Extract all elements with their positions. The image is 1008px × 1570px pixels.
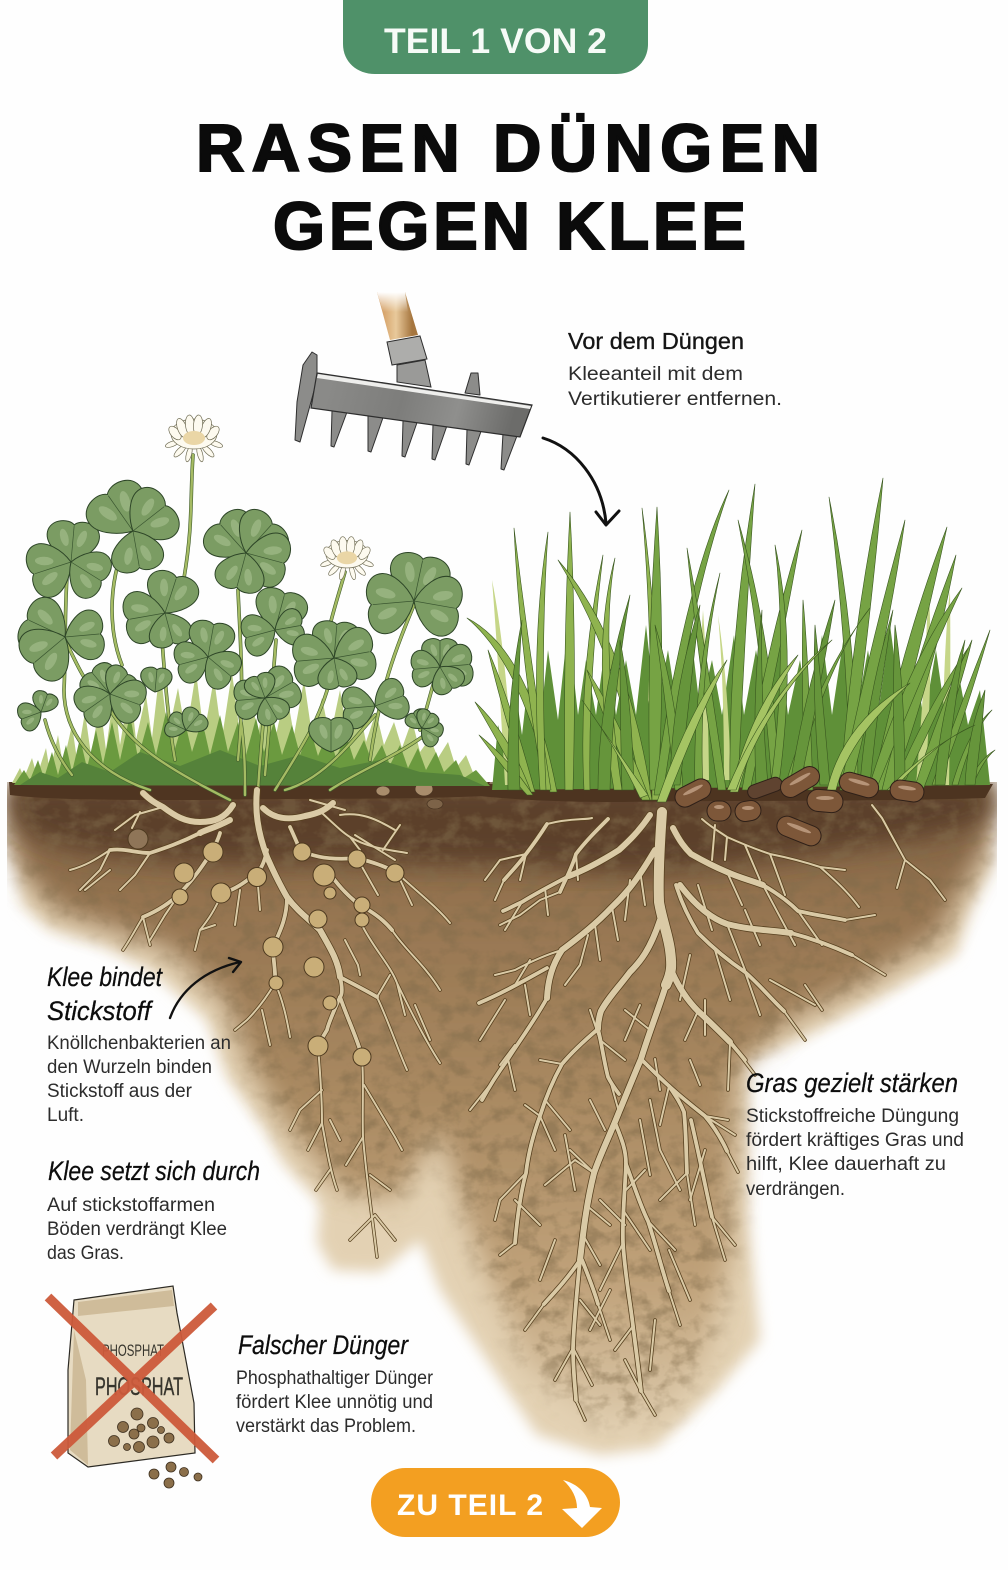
- callout: Klee bindet Stickstoff: Klee bindet: [47, 962, 163, 992]
- callout: Klee setzt sich durch: [47, 1156, 260, 1264]
- title: GEGEN KLEE: [273, 189, 746, 264]
- callout: Klee bindet Stickstoff: Knöllchenbakterien an: [47, 1033, 231, 1054]
- clover flowers: [165, 415, 374, 580]
- callout: Klee setzt sich durch: Böden verdrängt Klee: [47, 1219, 227, 1240]
- header tab: [343, 0, 648, 74]
- bag label: PHOSPHAT: [102, 1341, 164, 1360]
- callout: Gras gezielt stärken: hilft, Klee dauerhaft zu: [746, 1154, 946, 1175]
- callout: Gras gezielt stärken: verdrängen.: [746, 1179, 845, 1200]
- callout: vor dem Düngen: [568, 328, 782, 410]
- bag shading: [70, 1290, 174, 1465]
- callout: Klee setzt sich durch: das Gras.: [47, 1243, 124, 1264]
- bag granules: [108, 1408, 202, 1488]
- left grass tufts: [12, 668, 490, 786]
- title: RASEN DÜNGEN: [196, 111, 820, 186]
- clover stems: [45, 455, 436, 800]
- left roots: [70, 790, 450, 1257]
- callout: falscher Dünger: Falscher Dünger: [238, 1330, 409, 1360]
- rake ferrule: [387, 336, 431, 387]
- callout: Gras gezielt stärken: [746, 1068, 964, 1200]
- bag label: PHOSPHAT: [95, 1373, 183, 1401]
- header tab: TEIL 1 VON 2: [384, 22, 607, 61]
- button: zu Teil 2: ZU TEIL 2: [397, 1489, 543, 1522]
- icon: down arrow: [562, 1480, 602, 1528]
- icon: crossed-out phosphate bag: [48, 1286, 216, 1488]
- callout: Klee bindet Stickstoff: Stickstoff: [47, 996, 153, 1026]
- red cross: [48, 1297, 216, 1460]
- soil cross-section: [8, 782, 995, 1455]
- callout: falscher Dünger: fördert Klee unnötig und: [236, 1392, 433, 1413]
- bag label: [95, 1341, 183, 1401]
- rake head: [311, 373, 532, 437]
- callout: Gras gezielt stärken: Gras gezielt stärken: [746, 1068, 958, 1098]
- callout: falscher Dünger: Phosphathaltiger Dünger: [236, 1368, 434, 1389]
- callout: Klee bindet Stickstoff: Stickstoff aus der: [47, 1081, 193, 1102]
- button: zu Teil 2: [371, 1468, 620, 1537]
- callout: Gras gezielt stärken: Stickstoffreiche Düngung: [746, 1106, 959, 1127]
- callout: Gras gezielt stärken: fördert kräftiges Gras und: [746, 1130, 964, 1151]
- callout: Klee bindet Stickstoff: den Wurzeln binden: [47, 1057, 212, 1078]
- callout: vor dem Düngen: Kleeanteil mit dem: [568, 364, 743, 385]
- right grass: [467, 478, 995, 802]
- rake: [295, 292, 532, 470]
- callout: falscher Dünger: [236, 1330, 434, 1437]
- arrow: rake to grass: [543, 438, 619, 525]
- clover leaves: [12, 473, 474, 752]
- callout: vor dem Düngen: Vor dem Düngen: [568, 328, 744, 354]
- right roots: [470, 805, 945, 1420]
- callout: Klee setzt sich durch: Klee setzt sich durch: [48, 1156, 260, 1186]
- callout: Klee bindet Stickstoff: Luft.: [47, 1105, 84, 1126]
- callout: Klee bindet Stickstoff: [47, 962, 231, 1126]
- bag body: [68, 1286, 195, 1467]
- callout: vor dem Düngen: Vertikutierer entfernen.: [568, 389, 782, 410]
- title: [196, 111, 820, 264]
- root nodules: [128, 829, 404, 1066]
- rake handle: [377, 292, 418, 340]
- rake tines: [295, 352, 520, 470]
- callout: falscher Dünger: verstärkt das Problem.: [236, 1416, 416, 1437]
- fertilizer pellets: [672, 763, 925, 849]
- arrow: nodules: [170, 958, 241, 1018]
- callout: Klee setzt sich durch: Auf stickstoffarmen: [47, 1195, 215, 1216]
- soil pebbles: [376, 782, 443, 809]
